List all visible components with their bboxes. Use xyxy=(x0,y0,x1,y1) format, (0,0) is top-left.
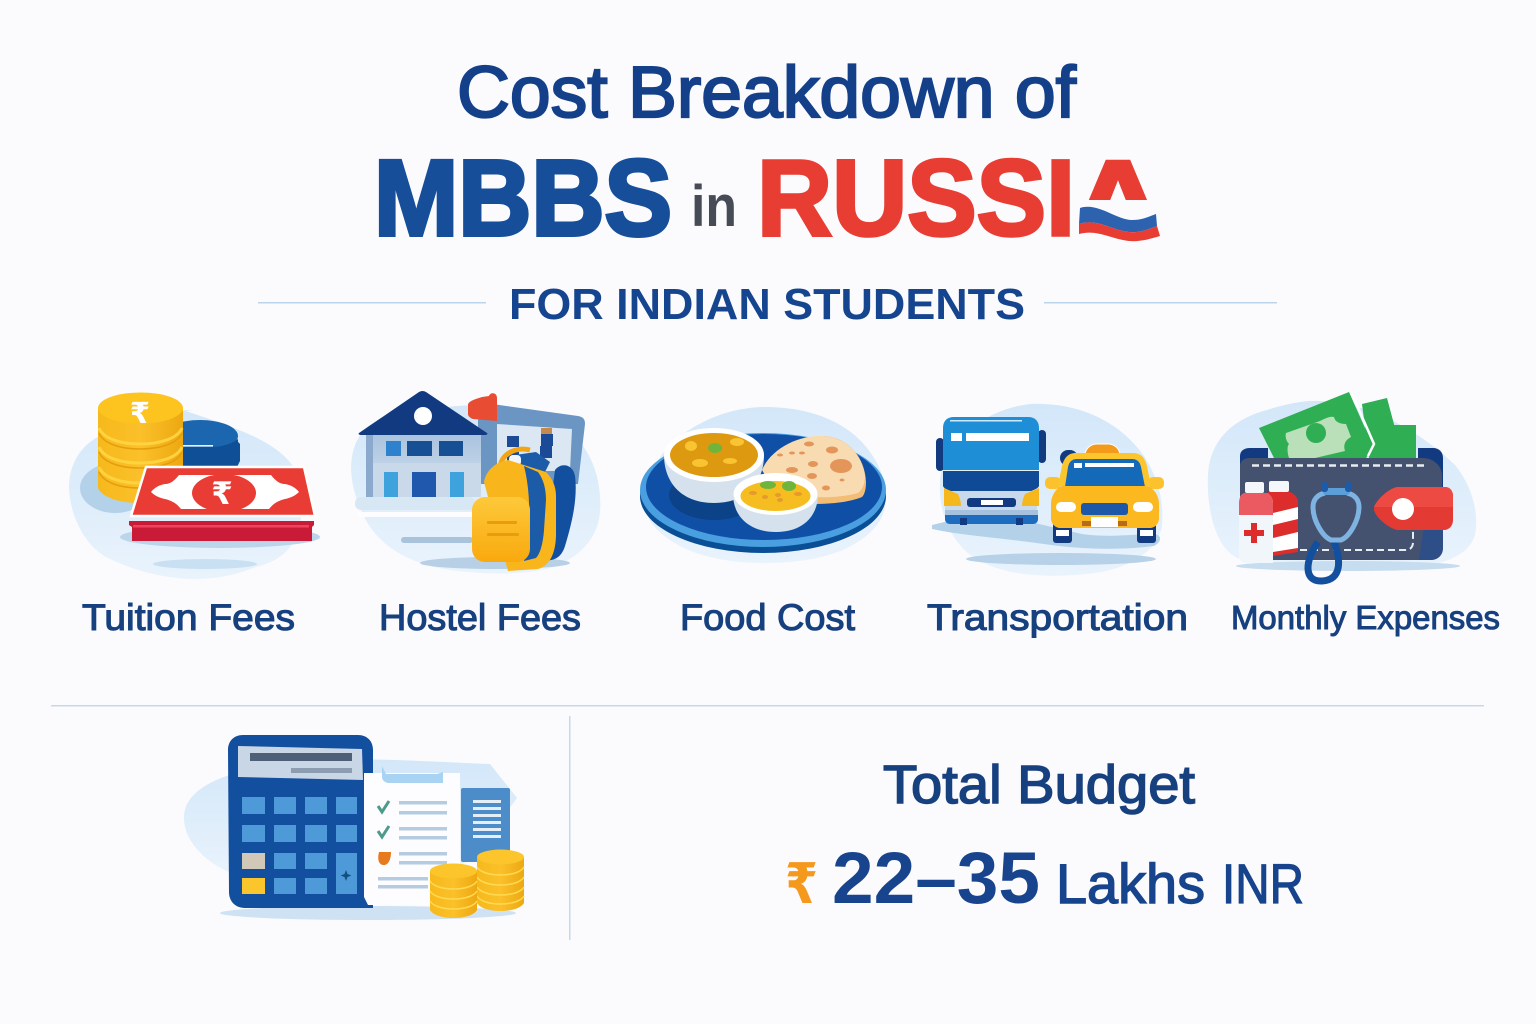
total budget heading: Total Budget xyxy=(883,755,1195,815)
label: tuition fees: Tuition Fees xyxy=(82,597,295,638)
wallet clasp xyxy=(1374,487,1453,530)
curry bowl xyxy=(664,428,764,503)
gold coin stack: ₹ xyxy=(130,398,150,430)
icon: hostel building with backpack xyxy=(351,391,600,574)
icon: tuition fees coins and banknotes xyxy=(69,392,320,579)
divider: horizontal xyxy=(51,705,1484,706)
label: monthly expenses: Monthly Expenses xyxy=(1231,599,1500,636)
gold coin stacks xyxy=(430,850,524,918)
stethoscope xyxy=(1308,482,1359,581)
title: in: in xyxy=(691,174,737,239)
subtitle left rule xyxy=(258,302,486,304)
naan xyxy=(762,436,866,504)
taxi xyxy=(1045,444,1164,543)
title: RUSSIA: A xyxy=(1073,138,1163,259)
blue coin xyxy=(162,420,240,467)
gold coin stack xyxy=(98,392,183,503)
total budget amount: Lakhs xyxy=(1056,852,1205,915)
total budget amount: 22–35 xyxy=(832,838,1040,919)
label: hostel fees: Hostel Fees xyxy=(379,597,581,638)
icon: calculator with checklist and coins xyxy=(184,735,524,920)
subtitle: FOR INDIAN STUDENTS xyxy=(509,280,1025,329)
total budget amount: INR xyxy=(1222,852,1304,915)
total budget amount: ₹ xyxy=(785,852,818,915)
house xyxy=(355,391,487,543)
banknote stack: ₹ xyxy=(211,476,233,511)
label: food cost: Food Cost xyxy=(680,597,856,638)
title: cost breakdown of: Cost Breakdown of xyxy=(457,53,1077,133)
title: RUSSIA xyxy=(762,158,1160,242)
backpack xyxy=(420,449,576,571)
folder xyxy=(461,788,510,862)
title: MBBS: MBBS xyxy=(374,137,672,258)
title: RUSSIA: RUSSI xyxy=(757,137,1075,258)
calculator xyxy=(228,735,373,908)
banknotes xyxy=(1259,392,1416,464)
divider: vertical xyxy=(569,716,570,940)
subtitle right rule xyxy=(1044,302,1277,304)
label: transportation: Transportation xyxy=(927,597,1188,638)
medicine bottles xyxy=(1239,481,1298,563)
icon: wallet with medicine and stethoscope xyxy=(1208,392,1476,581)
checklist xyxy=(364,766,460,905)
calendar board xyxy=(468,393,585,484)
plate xyxy=(640,433,886,553)
wallet xyxy=(1240,448,1443,560)
banknote stack xyxy=(120,467,320,548)
icon: bus and taxi xyxy=(932,404,1164,576)
total budget amount xyxy=(785,838,1304,919)
bus xyxy=(936,417,1046,525)
dal bowl xyxy=(733,473,818,532)
icon: food plate xyxy=(640,407,886,563)
